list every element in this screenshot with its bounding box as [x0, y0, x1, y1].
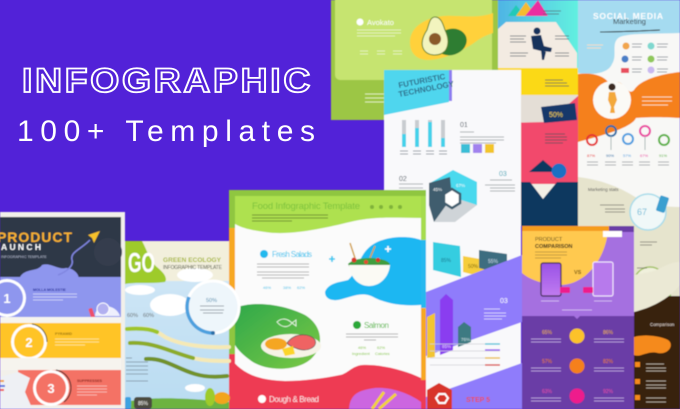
panel: business template	[498, 0, 578, 226]
periwinkle band	[0, 277, 121, 317]
tree	[205, 388, 230, 406]
dark cloud	[94, 238, 122, 266]
heading: avocado: Avokato	[367, 18, 394, 27]
icon: globe and triangle	[529, 160, 566, 178]
flight path	[58, 240, 90, 275]
red hexagon step 5: STEP 5	[466, 397, 490, 404]
green ring 55	[634, 267, 671, 299]
text lines	[33, 294, 77, 300]
circle 3: 3	[47, 381, 55, 396]
salmon stats: Calories	[375, 351, 390, 356]
comparison rows: 86%	[603, 330, 614, 336]
percent labels: 60%	[127, 313, 138, 319]
panel: futuristic technology template	[384, 70, 522, 409]
step 03: 03	[500, 298, 508, 305]
circle 2	[11, 324, 47, 360]
green hill	[125, 241, 166, 284]
green header	[235, 196, 421, 233]
comparison rows: 65%	[542, 330, 553, 336]
bar chart	[400, 120, 447, 154]
isometric boxes: 55%	[488, 259, 499, 265]
section 02	[399, 176, 423, 191]
yellow shape	[522, 231, 608, 285]
salad stats: 62%	[297, 285, 305, 290]
heading: marketing stats: Marketing stats	[588, 187, 619, 192]
blue blob	[325, 237, 421, 305]
wavy line 3	[146, 359, 227, 377]
comparison rows: 57%	[542, 359, 553, 365]
icon: colored triangles	[508, 0, 548, 16]
wavy line 1	[127, 328, 229, 347]
white band gap	[0, 317, 121, 323]
subheading: INFOGRAPHIC TEMPLATE	[1, 255, 47, 259]
icon: briefcase: 50%	[549, 112, 563, 119]
text lines	[510, 11, 569, 56]
text lines	[77, 386, 107, 395]
text lines	[535, 252, 567, 258]
text lines	[357, 30, 410, 102]
subheading: INFOGRAPHIC TEMPLATE	[163, 265, 223, 271]
white band gap	[0, 358, 121, 370]
blue header	[578, 0, 680, 74]
legend lines	[430, 344, 500, 365]
hexagon chart: 67%	[456, 183, 465, 188]
salmon stats: 46%	[358, 345, 366, 350]
section 02: 02	[399, 176, 407, 183]
percent tags: 85%	[138, 401, 149, 407]
panel: avocado template	[331, 0, 498, 120]
white circle with figure	[593, 81, 631, 119]
phone left	[541, 263, 561, 296]
social icons	[621, 42, 668, 74]
text lines	[646, 364, 666, 402]
heading: go: GO	[128, 247, 155, 278]
beige area	[498, 22, 577, 70]
grey band	[498, 95, 578, 125]
icon: salmon plate	[261, 334, 321, 358]
salad stats: 46%	[263, 285, 271, 290]
cloud	[20, 264, 78, 277]
arrow bars	[427, 294, 471, 358]
heading: salmon	[353, 321, 389, 330]
heading: futuristic technology: TECHNOLOGY	[398, 79, 455, 99]
heading: product comparison	[535, 237, 573, 250]
subtitle: 100+ Templates	[17, 115, 315, 148]
heading: dough and bread: Dough & Bread	[269, 395, 319, 404]
text lines	[587, 45, 672, 105]
red section	[498, 96, 578, 184]
blue ring 67: 67	[637, 207, 647, 217]
text lines	[126, 358, 148, 381]
heading: launch: AUNCH	[1, 242, 41, 252]
panel: go green ecology template	[125, 241, 239, 409]
panel: product launch template	[0, 212, 125, 409]
text: molla molestie: MOLLA MOLESTIE	[33, 288, 66, 292]
text lines	[346, 334, 398, 340]
comparison rows: 82%	[603, 359, 614, 365]
map colored bars	[0, 380, 5, 391]
icon: fish outline	[277, 319, 296, 327]
salmon band	[18, 370, 121, 405]
icon: avocado	[410, 13, 493, 60]
heading: green ecology: GREEN ECOLOGY	[163, 257, 222, 264]
circle 3	[33, 370, 71, 406]
section 01: 01	[460, 122, 468, 129]
markers	[635, 362, 640, 400]
comparison rows: 92%	[603, 389, 614, 395]
salmon stats: 62%	[377, 345, 385, 350]
isometric boxes: 85%	[441, 258, 452, 264]
beige area	[578, 177, 680, 300]
map icon area	[0, 372, 32, 409]
salad stats: 38%	[283, 285, 291, 290]
heading: fresh salads: Fresh Salads	[272, 250, 312, 259]
panel: food infographic template	[229, 190, 426, 409]
blue ring 67	[630, 194, 669, 230]
heading: futuristic technology: FUTURISTIC	[398, 72, 446, 90]
phone right	[593, 262, 613, 296]
title: INFOGRAPHIC	[22, 62, 313, 100]
icon: plus cyan	[329, 256, 335, 262]
arrow bars: 76%	[461, 337, 470, 342]
text: step 2: PYRAMID	[55, 332, 72, 336]
text: step 3: SUPPRESSES	[77, 379, 103, 383]
panel: product comparison template	[522, 226, 634, 409]
circle 1	[0, 279, 26, 317]
yellow band	[0, 323, 121, 358]
heading: salmon: Salmon	[364, 321, 389, 330]
circle 2: 2	[25, 335, 33, 350]
heading: product comparison: COMPARISON	[535, 244, 573, 250]
heading: food template: Food Infographic Template	[252, 201, 360, 212]
cyan header	[384, 70, 449, 115]
circle gauge: 50%	[206, 298, 217, 304]
purple blob	[349, 388, 421, 409]
panel: comparison dark template	[634, 262, 680, 409]
navy section	[498, 182, 578, 226]
arrow bars: 85%	[442, 344, 451, 349]
percent tags	[125, 397, 152, 409]
yellow band	[498, 68, 578, 96]
text lines	[55, 339, 99, 345]
heading: social media: SOCIAL MEDIA	[593, 11, 663, 21]
icon: briefcase	[541, 103, 577, 123]
social dots	[370, 205, 402, 209]
legend labels	[485, 343, 500, 345]
wavy line 2	[130, 343, 229, 361]
salad stats	[263, 285, 305, 290]
section 01	[460, 122, 504, 153]
icon: flasks	[88, 303, 120, 320]
heading: comparison: Comparison	[650, 322, 675, 327]
beige header	[140, 241, 229, 281]
text lines	[257, 264, 309, 278]
comparison rows: 63%	[542, 389, 553, 395]
vs label: VS	[574, 270, 582, 276]
icons row: 87%	[587, 153, 595, 158]
icons row: 90%	[606, 153, 614, 158]
text lines	[600, 205, 657, 268]
pink tags	[560, 287, 593, 293]
red hexagon step 5	[427, 383, 490, 409]
red bottom	[229, 356, 421, 409]
panel: social media template	[578, 0, 680, 300]
purple diagonal band lower	[426, 363, 522, 409]
percent label second: 60%	[143, 313, 154, 319]
purple diagonal band	[426, 255, 522, 356]
clouds	[125, 268, 213, 392]
section 03	[485, 171, 515, 191]
green ring 55: 55	[640, 277, 652, 288]
icon: chopsticks	[372, 392, 396, 409]
isometric boxes	[433, 242, 507, 278]
text lines	[252, 215, 328, 221]
salmon stats	[352, 345, 390, 356]
icon: salad bowl	[348, 243, 390, 286]
orange blob	[634, 336, 671, 356]
isometric boxes: 50%	[468, 264, 479, 270]
hexagon chart	[429, 170, 477, 222]
icon: seated person	[531, 28, 552, 60]
text lines	[545, 80, 569, 143]
icons row: 91%	[659, 153, 667, 158]
comparison rows	[531, 328, 624, 404]
icon: paper plane	[88, 231, 100, 243]
hexagon chart: 45%	[433, 187, 442, 192]
step 03	[484, 298, 508, 319]
icons row	[587, 126, 669, 165]
icon: plus sparkle	[385, 246, 391, 252]
green blob	[235, 304, 320, 369]
salmon stats: Ingredient	[352, 351, 371, 356]
orange shape	[578, 72, 680, 142]
ground	[125, 398, 229, 409]
icons row: 67%	[640, 153, 648, 158]
circle gauge	[187, 281, 239, 335]
notch	[574, 316, 580, 319]
icons row: 57%	[623, 153, 631, 158]
circle 1: 1	[3, 291, 11, 306]
heading: product comparison: PRODUCT	[535, 237, 563, 243]
text lines	[541, 301, 612, 310]
white tag	[603, 231, 622, 237]
heading: marketing: Marketing	[613, 17, 646, 26]
section 03: 03	[499, 171, 507, 178]
